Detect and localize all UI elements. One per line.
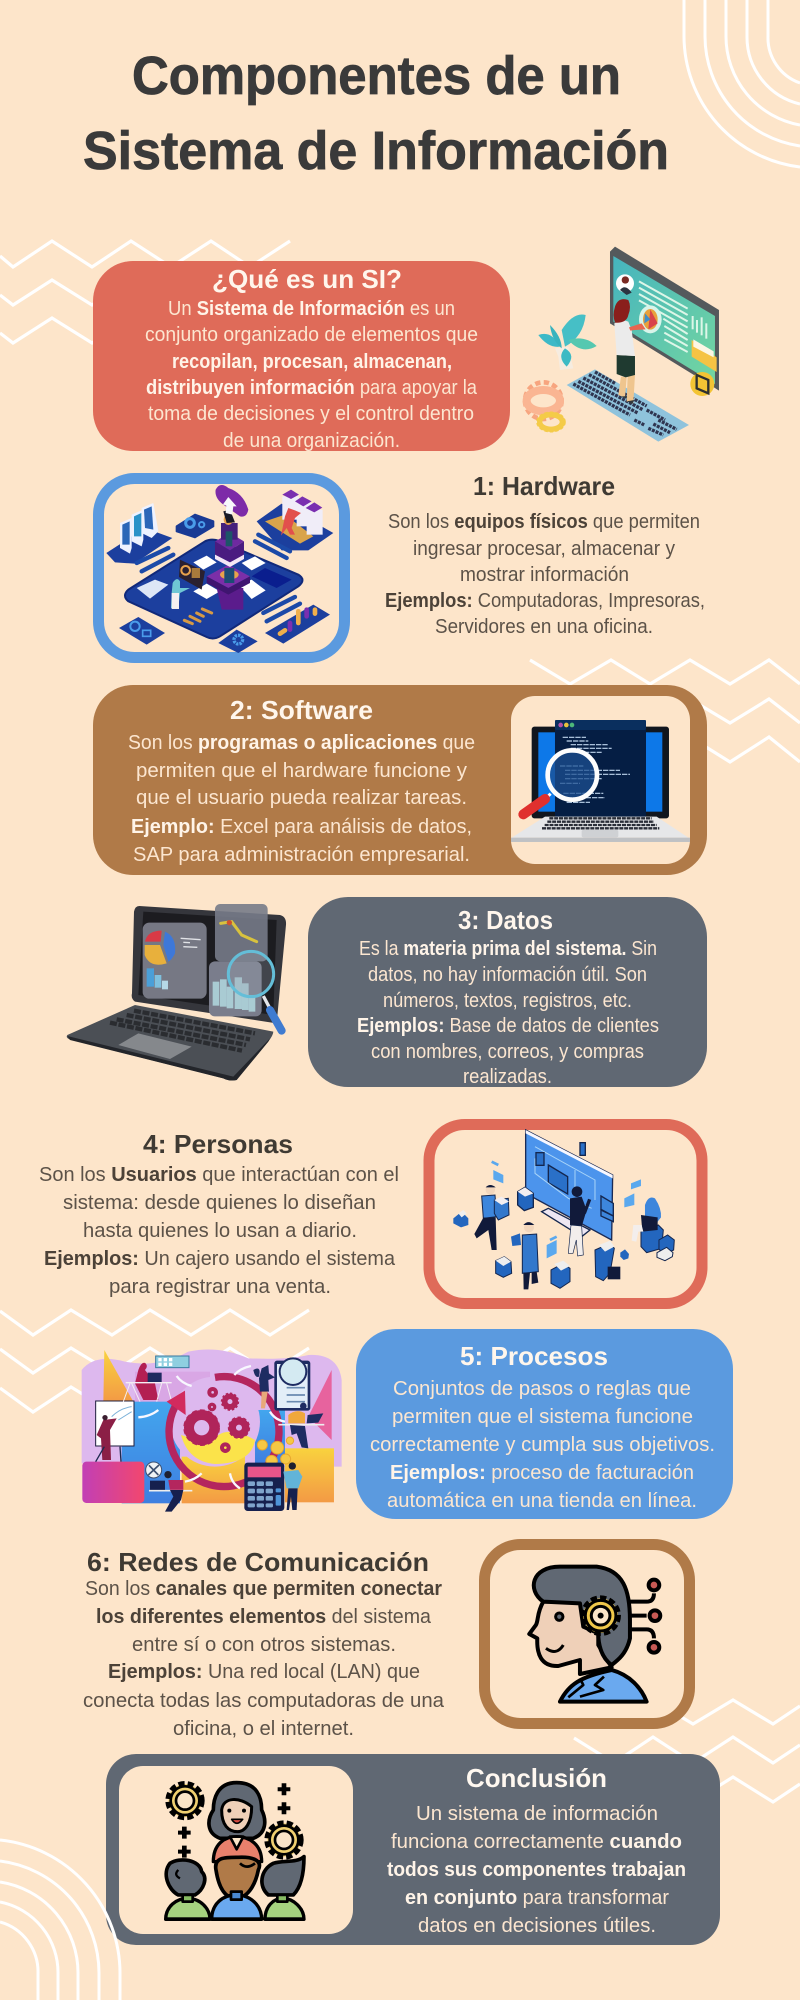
text block: personas: Son los Usuarios que interactúan con el (39, 1163, 399, 1186)
heading: redes de comunicacion: 6: Redes de Comunicación (87, 1547, 429, 1577)
panel: conclusion: todos sus componentes trabajan (387, 1858, 686, 1881)
panel: procesos: automática en una tienda en línea. (387, 1489, 697, 1512)
text block: hardware (385, 471, 705, 638)
text block: redes de comunicacion: Ejemplos: Una red local (LAN) que (108, 1660, 420, 1683)
heading: conclusion: Conclusión (466, 1763, 607, 1793)
text: definicion: recopilan, procesan, almacenan, (172, 350, 452, 373)
panel: datos: números, textos, registros, etc. (383, 989, 632, 1012)
text block: personas: sistema: desde quienes lo diseñan (63, 1191, 376, 1214)
text block: redes de comunicacion: Son los canales que permiten conectar (85, 1577, 442, 1600)
text block: hardware: Son los equipos físicos que permiten (388, 510, 700, 533)
title: Sistema de Información (83, 121, 669, 181)
text block: personas (39, 1129, 399, 1298)
text block: personas: hasta quienes lo usan a diario. (83, 1219, 357, 1242)
panel: procesos: Conjuntos de pasos o reglas que (393, 1377, 691, 1400)
panel: datos (308, 897, 707, 1088)
text block: redes de comunicacion: entre sí o con otros sistemas. (132, 1633, 396, 1656)
text block: hardware: ingresar procesar, almacenar y (413, 537, 676, 560)
text block: hardware: Servidores en una oficina. (435, 615, 653, 638)
panel: software: Son los programas o aplicaciones que (128, 731, 475, 754)
text: definicion: conjunto organizado de elementos que (145, 323, 478, 346)
panel: software: SAP para administración empresarial. (133, 843, 470, 866)
icon: equipo de personas frente a pantalla (453, 1130, 674, 1289)
panel: conclusion: funciona correctamente cuando (391, 1830, 682, 1853)
heading: personas: 4: Personas (143, 1129, 293, 1159)
panel: software: que el usuario pueda realizar tareas. (136, 786, 467, 809)
icon: equipo con engranajes (165, 1783, 304, 1920)
panel: hardware frame (98, 478, 344, 658)
icon: procesos y engranajes (82, 1349, 342, 1512)
text: definicion: toma de decisiones y el control dentro (148, 402, 474, 425)
panel: conclusion (106, 1754, 720, 1945)
text block: hardware: Ejemplos: Computadoras, Impresoras, (385, 589, 705, 612)
icon: laptop con graficas (67, 904, 286, 1081)
heading: procesos: 5: Procesos (460, 1341, 608, 1371)
panel: redes frame (484, 1544, 690, 1724)
text block: hardware: mostrar información (460, 563, 629, 586)
text block: personas: Ejemplos: Un cajero usando el sistema (44, 1247, 396, 1270)
panel: personas frame (429, 1124, 702, 1304)
text: definicion: de una organización. (223, 429, 400, 452)
text block: redes de comunicacion: oficina, o el internet. (173, 1717, 354, 1740)
panel: procesos: Ejemplos: proceso de facturación (390, 1461, 694, 1484)
icon: mujer frente a monitor y teclado (525, 247, 719, 442)
heading: hardware: 1: Hardware (473, 471, 615, 501)
panel: conclusion: datos en decisiones útiles. (418, 1914, 656, 1937)
panel: software: permiten que el hardware funcione y (136, 759, 468, 782)
panel: conclusion: Un sistema de información (416, 1802, 658, 1825)
panel: datos: Ejemplos: Base de datos de clientes (357, 1014, 659, 1037)
text: definicion: Un Sistema de Información es un (168, 297, 455, 320)
icon: cabeza con engranaje y circuitos (529, 1567, 660, 1702)
panel: conclusion: en conjunto para transformar (405, 1886, 669, 1909)
heading: que es un SI: ¿Qué es un SI? (212, 264, 402, 294)
panel: datos: con nombres, correos, y compras (371, 1040, 644, 1063)
text: definicion (145, 297, 478, 452)
text block: redes de comunicacion: conecta todas las computadoras de una (83, 1689, 445, 1712)
title: Componentes de un (132, 46, 621, 106)
heading: software: 2: Software (230, 695, 373, 725)
text block: redes de comunicacion (83, 1547, 445, 1740)
text block: personas: para registrar una venta. (109, 1275, 331, 1298)
panel: datos: Es la materia prima del sistema. Sin (359, 937, 657, 960)
text: definicion: distribuyen información para apoyar la (146, 376, 478, 399)
panel: procesos: permiten que el sistema funcione (392, 1405, 693, 1428)
panel: procesos: correctamente y cumpla sus objetivos. (370, 1433, 715, 1456)
panel: que es un SI (93, 261, 510, 452)
panel: software: Ejemplo: Excel para análisis de datos, (131, 815, 472, 838)
panel: software (93, 685, 707, 875)
icon: laptop con codigo y lupa (511, 696, 690, 864)
heading: datos: 3: Datos (458, 905, 553, 935)
icon: plataforma isometrica de hardware (106, 485, 333, 653)
text block: redes de comunicacion: los diferentes elementos del sistema (96, 1605, 432, 1628)
panel: datos: realizadas. (463, 1065, 552, 1088)
image box: conclusion (119, 1766, 353, 1934)
panel: datos: datos, no hay información útil. Son (368, 963, 647, 986)
panel: procesos (356, 1329, 733, 1519)
title (83, 46, 669, 181)
